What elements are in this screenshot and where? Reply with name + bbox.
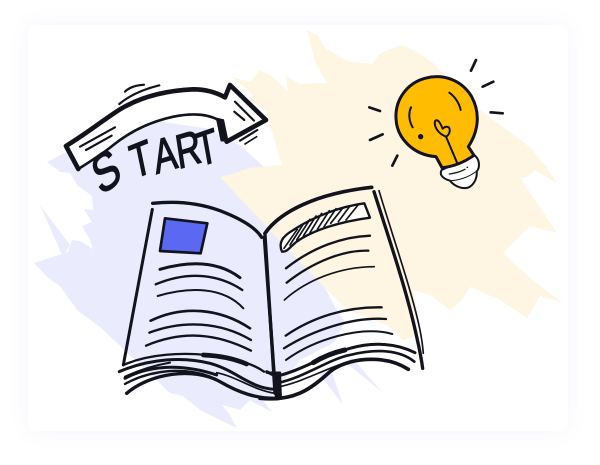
left text lines (146, 264, 251, 351)
arrow lower outline (78, 114, 218, 169)
bulb dot (418, 134, 423, 139)
left page edges (119, 354, 277, 398)
glass (396, 77, 477, 168)
filament (435, 120, 457, 163)
highlights and socket details (409, 93, 476, 181)
right page (260, 187, 423, 399)
arrow detail strokes (80, 85, 257, 150)
start label: START (84, 118, 222, 206)
spine base (273, 372, 282, 399)
brush stroke: cream (220, 30, 563, 340)
arrow fill (66, 85, 266, 169)
socket (441, 155, 479, 188)
arrow thick notch (216, 117, 229, 142)
icon: light bulb (369, 60, 503, 188)
open book (119, 187, 423, 399)
brush stroke: lavender (34, 117, 345, 428)
page outline (265, 187, 423, 393)
page outline (123, 202, 274, 372)
right page edges (260, 344, 415, 399)
rays (369, 60, 503, 166)
left page (119, 202, 277, 398)
card background (28, 25, 568, 431)
icon: start arrow banner (66, 85, 266, 169)
blue square (160, 218, 207, 253)
right text lines (284, 236, 392, 360)
brush streaks: lavender (40, 205, 382, 412)
arrow upper outline (66, 85, 266, 169)
hatched title bar (281, 203, 370, 252)
